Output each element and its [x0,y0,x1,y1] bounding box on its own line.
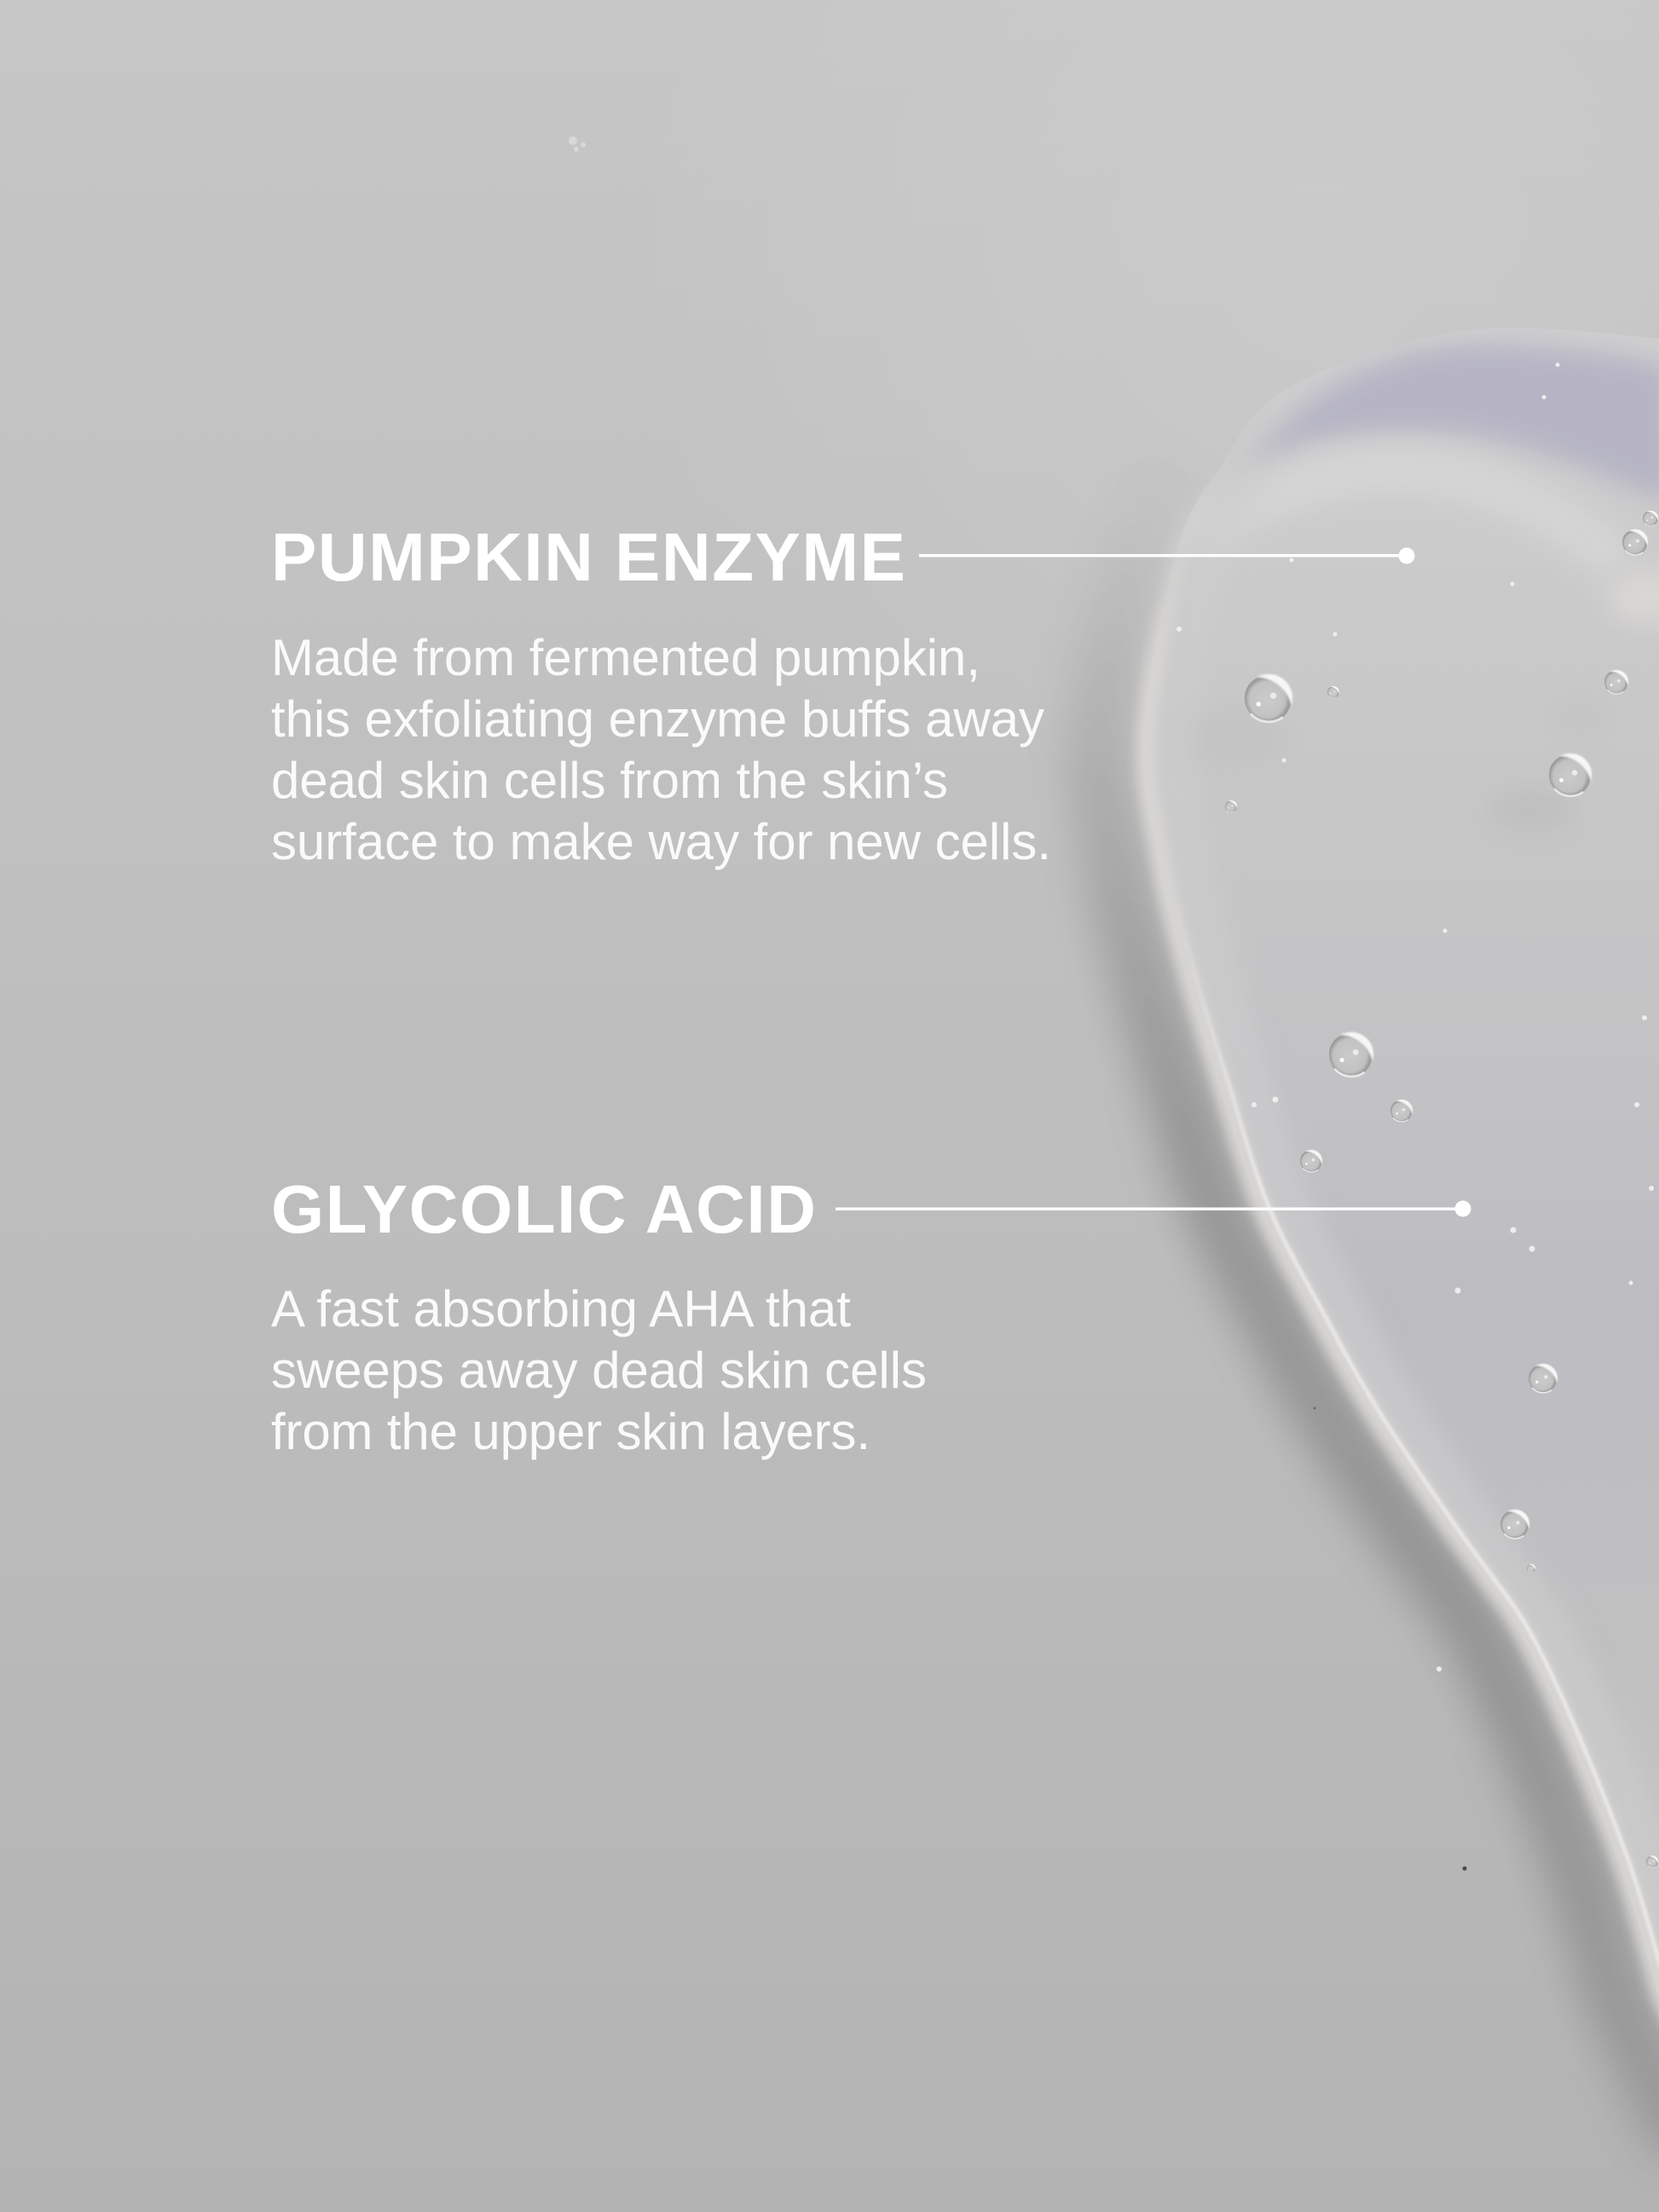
cast shadow of the gel edge [1098,472,1659,2148]
callout: pumpkin enzyme [271,519,1415,870]
gel inner reflections [1244,339,1659,1851]
callout: glycolic acid [271,1171,1471,1460]
leader line: glycolic acid [835,1200,1471,1217]
body text: pumpkin enzyme: dead skin cells from the skin’s [271,752,948,809]
body text: pumpkin enzyme: this exfoliating enzyme buffs away [271,690,1044,748]
gel body [1142,328,1659,1997]
body text: glycolic acid: A fast absorbing AHA that [271,1280,851,1337]
leader line: pumpkin enzyme [919,547,1415,564]
bubbles in the gel [1176,363,1658,1870]
heading: pumpkin enzyme: PUMPKIN ENZYME [271,519,905,595]
body text: pumpkin enzyme: surface to make way for new cells. [271,813,1051,870]
heading: glycolic acid: GLYCOLIC ACID [271,1171,816,1247]
gel serum blob [1098,328,1659,2148]
body text: glycolic acid: from the upper skin layers. [271,1403,870,1460]
body text: pumpkin enzyme: Made from fermented pumpkin, [271,629,980,686]
body text: glycolic acid: sweeps away dead skin cells [271,1342,927,1399]
gel edge highlight [1146,472,1659,2148]
